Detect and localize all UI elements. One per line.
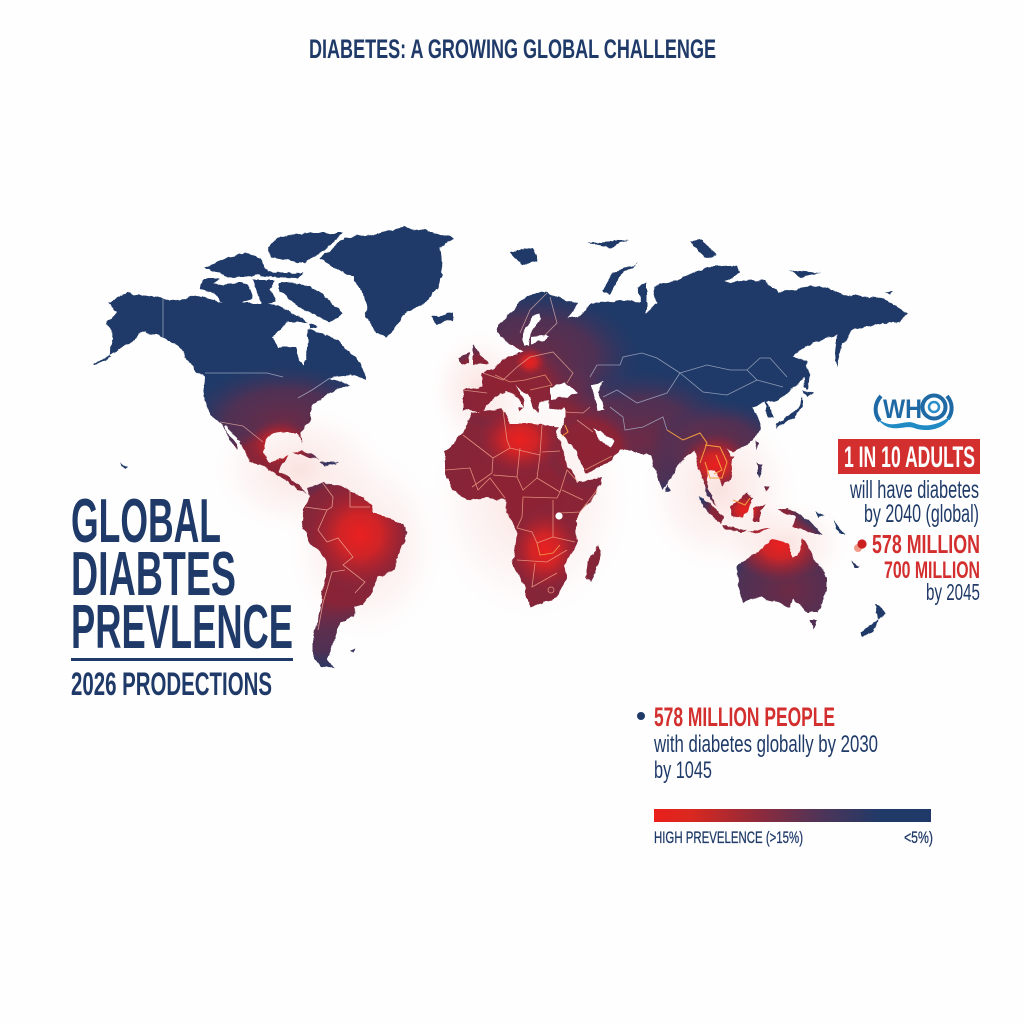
country borders: eurasia xyxy=(463,293,787,470)
icon: WHO logo xyxy=(876,394,952,430)
legend: prevalence colour scale: <5%) xyxy=(904,828,933,847)
heading line 2: DIABTES xyxy=(71,540,236,609)
text block: will have diabetes xyxy=(849,476,979,528)
callout: 1 in 10 adults badge xyxy=(838,439,980,474)
legend: prevalence colour scale: HIGH PREVELENCE (>15%) xyxy=(654,828,803,847)
heading rule xyxy=(71,658,293,661)
hot-zone borders: himalaya and southeast asia xyxy=(562,425,750,505)
marker: red dot xyxy=(854,539,867,552)
icon: WHO logo: WH xyxy=(883,394,922,424)
text block: with diabetes globally xyxy=(653,731,878,784)
marker: white dot on east africa xyxy=(555,512,563,520)
maroon regional shading xyxy=(233,346,802,621)
subheading: 2026 PRODECTIONS xyxy=(71,666,272,702)
world map landmass with prevalence heat shading xyxy=(94,226,908,668)
legend: prevalence colour scale xyxy=(654,809,933,847)
text block: with diabetes globally: by 1045 xyxy=(654,757,712,784)
country borders: south america xyxy=(305,482,370,630)
text block: with diabetes globally: with diabetes globally by 2030 xyxy=(653,731,878,758)
heading line 1: GLOBAL xyxy=(71,487,221,556)
marker: navy bullet xyxy=(637,712,645,720)
map glow halos xyxy=(205,325,855,650)
country borders: africa xyxy=(445,410,597,593)
plum transition zones xyxy=(206,298,860,668)
infographic canvas xyxy=(71,39,980,847)
title: DIABETES: A GROWING GLOBAL CHALLENGE xyxy=(309,34,716,64)
text: by 2045: by 2045 xyxy=(926,579,980,605)
stat: 578 million and 700 million xyxy=(872,529,980,584)
heading line 3: PREVLENCE xyxy=(71,593,293,662)
main heading: global diabtes prevlence xyxy=(71,487,293,662)
country borders: north america xyxy=(163,298,330,442)
red hot spots xyxy=(246,346,830,596)
stat: 578 million people: 578 MILLION PEOPLE xyxy=(654,702,835,732)
